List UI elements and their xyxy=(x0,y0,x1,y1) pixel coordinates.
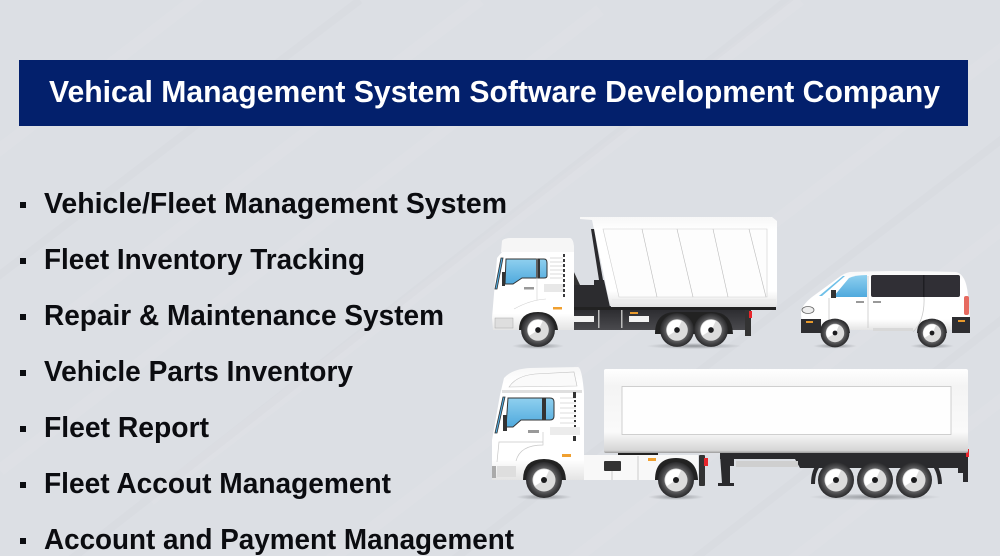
cab xyxy=(492,238,574,330)
frame xyxy=(584,455,698,480)
item: Fleet Accout Management: Fleet Accout Management xyxy=(44,468,391,500)
title banner xyxy=(19,60,968,126)
van windows xyxy=(834,275,867,297)
van bumpers xyxy=(801,319,821,333)
item: Repair and Maintenance System: Repair & Maintenance System xyxy=(44,300,444,332)
chassis xyxy=(573,306,750,330)
item: Account and Payment Management: Account and Payment Management xyxy=(44,524,514,556)
feature list xyxy=(20,188,514,556)
trailer box xyxy=(604,369,968,453)
item: Fleet Inventory Tracking: Fleet Inventory Tracking xyxy=(44,244,365,276)
illustration: dump truck xyxy=(492,217,777,349)
tipper body xyxy=(580,217,777,307)
wheels xyxy=(523,459,566,480)
wheels xyxy=(519,312,558,330)
illustration: tractor trailer xyxy=(492,367,969,500)
trailer chassis xyxy=(720,452,968,482)
title: Vehical Management System Software Development Company xyxy=(49,74,941,109)
item: Vehicle Parts Inventory: Vehicle Parts Inventory xyxy=(44,356,353,388)
van body xyxy=(801,271,970,330)
louvres xyxy=(550,258,563,278)
illustration: van xyxy=(801,271,970,348)
louvres xyxy=(560,398,576,423)
item: Fleet Report: Fleet Report xyxy=(44,412,209,444)
cab window xyxy=(506,398,554,427)
item: Vehicle/Fleet Management System: Vehicle/Fleet Management System xyxy=(44,188,507,220)
hoist xyxy=(591,229,603,280)
cab xyxy=(492,367,584,480)
